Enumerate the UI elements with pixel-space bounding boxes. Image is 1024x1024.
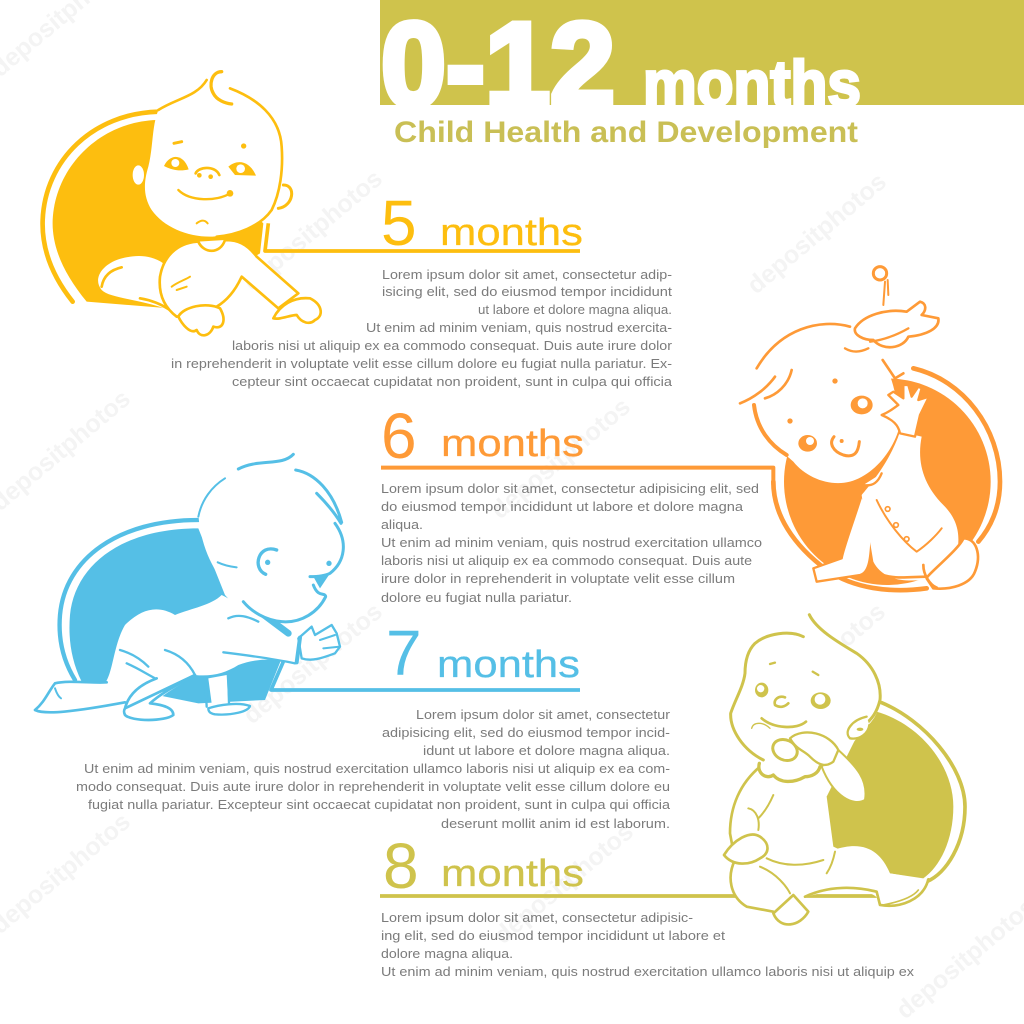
hair and head line: [809, 615, 880, 723]
front knee: [125, 675, 195, 720]
torso and arm: [160, 240, 298, 317]
heading: 6 months: [381, 400, 584, 472]
yellow disc: [53, 120, 263, 308]
heading: 6 months: 6: [381, 400, 417, 472]
face outline: [243, 523, 343, 622]
bib: [759, 763, 820, 781]
text block: 5 months: cepteur sint occaecat cupidatat non proident, sunt in culpa qui officia: [232, 375, 672, 389]
heading: 8 months: 8: [383, 830, 419, 902]
head: [145, 90, 282, 237]
text: depositphotos: [486, 392, 636, 525]
heading: 8 months: months: [441, 853, 584, 895]
text block: 5 months: ut labore et dolore magna aliqua.: [478, 303, 672, 317]
text block: 5 months: laboris nisi ut aliquip ex ea commodo consequat. Duis aute irure dolor: [232, 339, 672, 353]
text block: 8 months: Ut enim ad minim veniam, quis nostrud exercitation ullamco laboris nisi ut aliquip ex: [381, 965, 915, 979]
body: [730, 767, 928, 912]
text block: 7 months: [76, 708, 670, 831]
hand: [298, 625, 340, 660]
olive ring: [882, 703, 965, 882]
heading: 7 months: months: [437, 644, 580, 686]
raised arm: [822, 750, 866, 802]
heading: 5 months: [381, 187, 583, 259]
text block: 7 months: fugiat nulla pariatur. Excepteur sint occaecat cupidatat non proident, sunt in culpa qui officia: [88, 798, 670, 812]
hair curl: [211, 72, 232, 104]
left arm and hand: [813, 495, 873, 582]
text: depositphotos: [489, 817, 639, 950]
text block: 7 months: Ut enim ad minim veniam, quis nostrud exercitation ullamco laboris nisi ut aliquip ex ea com-: [84, 762, 670, 776]
right hand: [273, 298, 321, 323]
olive disc: [827, 710, 953, 878]
text block: 5 months: Ut enim ad minim veniam, quis nostrud exercita-: [366, 321, 672, 335]
head: [198, 463, 345, 622]
text block: 6 months: [381, 482, 762, 605]
smile and chin: [178, 190, 230, 199]
subtitle: Child Health and Development: [394, 116, 858, 149]
heading: 7 months: 7: [386, 617, 422, 689]
text block: 7 months: idunt ut labore et dolore magna aliqua.: [423, 744, 670, 758]
text: depositphotos: [238, 597, 388, 730]
hair: [740, 370, 792, 403]
text block: 8 months: [381, 911, 915, 979]
ear: [848, 717, 869, 739]
text block: 5 months: isicing elit, sed do eiusmod tempor incididunt: [382, 285, 673, 299]
banner band: [380, 0, 1024, 105]
pacifier: [769, 736, 801, 764]
foot and leg: [927, 538, 978, 589]
text block: 6 months: Ut enim ad minim veniam, quis nostrud exercitation ullamco: [381, 536, 762, 550]
heading: 8 months: [383, 830, 584, 902]
collar band: [255, 608, 288, 633]
front arm and foot: [208, 675, 248, 714]
heading: 5 months: months: [440, 212, 583, 254]
text block: 7 months: modo consequat. Duis aute irure dolor in reprehenderit in voluptate velit esse cillum dolore eu: [76, 780, 670, 794]
torso: [862, 432, 958, 580]
ears: [278, 185, 292, 208]
nose: [775, 697, 788, 707]
neck crease: [863, 473, 882, 485]
text: depositphotos: [742, 167, 892, 300]
heading: 5 months: 5: [381, 187, 417, 259]
heading: 6 months: months: [441, 423, 584, 465]
eyes and brows: [755, 683, 768, 697]
knee: [876, 547, 927, 580]
hand on knee: [724, 835, 767, 864]
baby: 8 months, olive: [380, 615, 965, 924]
orange disc: [784, 378, 991, 585]
baby: 6 months, orange: [381, 267, 1000, 590]
text block: 6 months: aliqua.: [381, 518, 423, 532]
bow: [855, 302, 938, 347]
text block: 5 months: [171, 268, 673, 389]
text block: 6 months: Lorem ipsum dolor sit amet, consectetur adipisicing elit, sed: [381, 482, 759, 496]
head: [731, 633, 880, 761]
text block: 6 months: irure dolor in reprehenderit in voluptate velit esse cillum: [381, 572, 735, 586]
title: months: months: [643, 47, 861, 120]
back leg and foot: [35, 682, 132, 712]
text block: 8 months: Lorem ipsum dolor sit amet, consectetur adipisic-: [381, 911, 693, 925]
text block: 6 months: do eiusmod tempor incididunt ut labore et dolore magna: [381, 500, 743, 514]
head: [754, 324, 900, 483]
baby: 5 months, yellow: [43, 72, 580, 335]
title banner: [380, 0, 1024, 132]
buttons: [885, 507, 890, 511]
baby: 7 months, blue: [35, 454, 580, 720]
connector line: [265, 223, 580, 251]
hair pin: [873, 267, 887, 280]
blue disc: [69, 528, 282, 703]
diaper and leg: [98, 256, 170, 310]
text block: 6 months: laboris nisi ut aliquip ex ea commodo consequat. Duis aute: [381, 554, 752, 568]
nose: [196, 168, 219, 175]
hair: [238, 454, 293, 469]
connector line: [381, 468, 773, 485]
text block: 8 months: ing elit, sed do eiusmod tempor incididunt ut labore et: [381, 929, 726, 943]
text block: 5 months: in reprehenderit in voluptate velit esse cillum dolore eu fugiat nulla pariatur. Ex-: [171, 357, 672, 371]
text block: 7 months: Lorem ipsum dolor sit amet, consectetur: [416, 708, 670, 722]
title: 0-12: 0-12: [381, 0, 615, 132]
text block: 5 months: Lorem ipsum dolor sit amet, consectetur adip-: [382, 268, 672, 282]
eyes and face: [851, 396, 873, 414]
connector line: [380, 890, 877, 901]
collar: [198, 240, 225, 251]
eye: [258, 549, 277, 574]
left hand: [178, 305, 223, 335]
text block: 7 months: deserunt mollit anim id est laborum.: [441, 817, 670, 831]
heading: 7 months: [386, 617, 580, 689]
mouth: [762, 718, 806, 727]
eyes: [164, 157, 189, 170]
connector line: [271, 662, 580, 690]
waving hand: [882, 385, 929, 437]
text block: 8 months: dolore magna aliqua.: [381, 947, 513, 961]
foot: [773, 895, 808, 924]
text: depositphotos: [741, 597, 891, 730]
orange ring: [773, 368, 1000, 590]
text block: 7 months: adipisicing elit, sed do eiusmod tempor incid-: [382, 726, 670, 740]
blue ring: [60, 520, 198, 680]
text block: 6 months: dolore eu fugiat nulla pariatur.: [381, 591, 572, 605]
hand at mouth: [790, 732, 838, 765]
yellow ring: [43, 112, 158, 302]
body and arm: [105, 595, 302, 708]
body fold lines: [748, 795, 835, 893]
text: depositphotos: [238, 164, 388, 297]
